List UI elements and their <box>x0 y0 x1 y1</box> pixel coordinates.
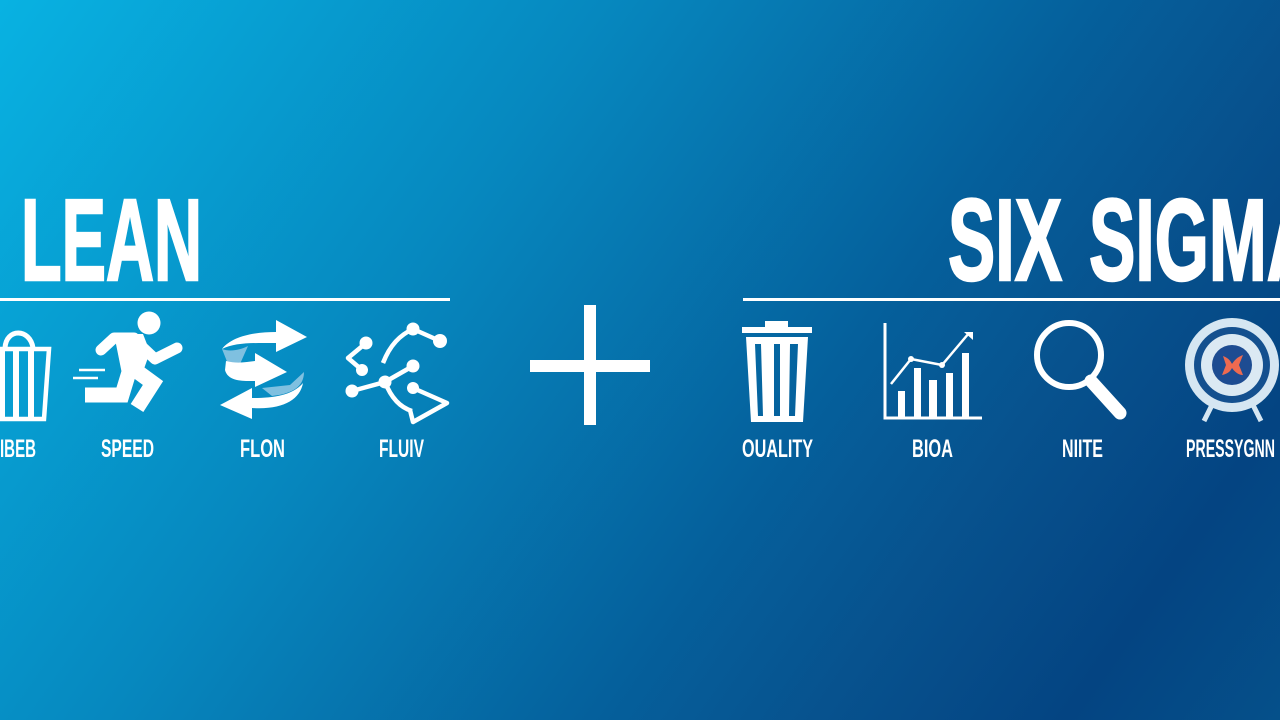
icon: network flow nodes <box>346 322 447 422</box>
six sigma divider line <box>743 298 1280 301</box>
label: fluid: FLUIV <box>379 435 424 463</box>
label: waste: IBEB <box>0 435 36 463</box>
label: analyse: NIITE <box>1062 435 1103 463</box>
label: data: BIOA <box>912 435 953 463</box>
icon: cycling flow arrows <box>220 320 307 419</box>
panel: lean <box>0 175 450 463</box>
label: quality: OUALITY <box>742 435 813 463</box>
panel: six sigma <box>742 175 1280 463</box>
icon: precision target <box>1185 318 1279 421</box>
label: flow: FLON <box>240 435 285 463</box>
icon: bar and line chart <box>885 323 982 418</box>
label: speed: SPEED <box>101 435 154 463</box>
heading: LEAN: LEAN <box>21 175 202 305</box>
heading: SIX: SIX <box>948 175 1062 305</box>
icon: quality bin <box>742 321 812 422</box>
plus sign <box>530 305 650 425</box>
icon: magnifying glass <box>1037 323 1120 413</box>
icon: waste bin <box>0 333 49 419</box>
icon: running figure <box>73 312 177 408</box>
lean divider line <box>0 298 450 301</box>
